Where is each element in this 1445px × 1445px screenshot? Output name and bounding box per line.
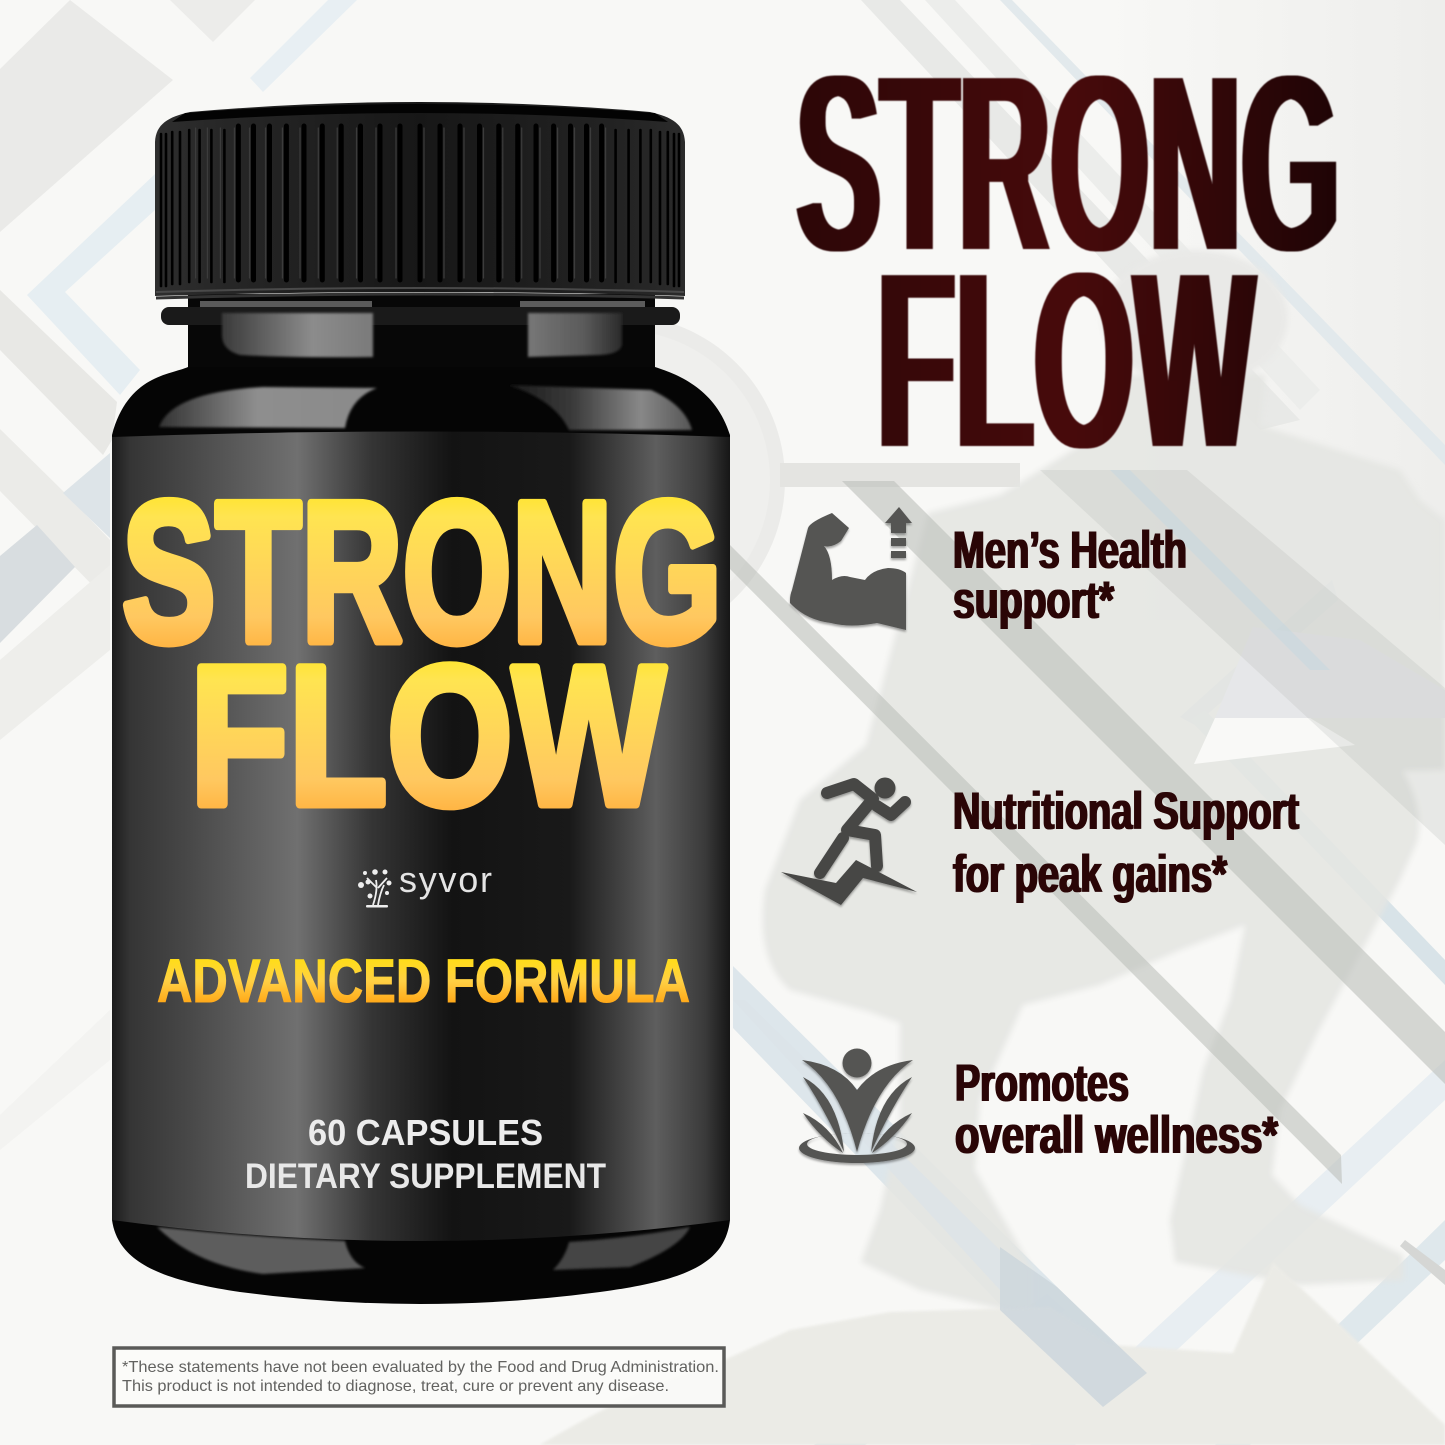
- brand logo: syvor: syvor: [399, 859, 492, 900]
- label title: STRONG FLOW: FLOW: [190, 625, 665, 846]
- icon: runner: [781, 778, 917, 905]
- background: faded athlete silhouette: [455, 250, 1445, 1445]
- text: promotes overall wellness: Promotes: [955, 1054, 1129, 1113]
- text: promotes overall wellness: [955, 1054, 1278, 1165]
- disclaimer text: *These statements have not been evaluated by the Food and Drug Administration.: [122, 1359, 719, 1376]
- shoulder highlights: [159, 385, 692, 430]
- text: men's health support: [953, 521, 1187, 630]
- bottle body: [112, 367, 730, 1304]
- cap ridges: [161, 126, 679, 286]
- text: men's health support: Men’s Health: [953, 521, 1187, 580]
- disclaimer text: This product is not intended to diagnose, treat, cure or prevent any disease.: [122, 1378, 669, 1395]
- icon: tree: [358, 869, 392, 908]
- text: nutritional support for peak gains: for peak gains*: [953, 845, 1227, 904]
- text: nutritional support for peak gains: [953, 782, 1299, 904]
- benefit: nutritional support: [781, 778, 1299, 905]
- benefit: men's health: [790, 507, 1187, 630]
- label: [112, 432, 730, 1241]
- icon: flexed arm with up arrow: [790, 507, 912, 630]
- disclaimer box: [114, 1348, 724, 1406]
- label: capsule count: 60 CAPSULES: [308, 1112, 543, 1153]
- text: men's health support: support*: [953, 571, 1114, 630]
- label title: STRONG FLOW: [122, 461, 722, 846]
- brand logo: syvor: [358, 859, 492, 908]
- bottle neck: [161, 294, 680, 374]
- title: STRONG FLOW: [796, 20, 1340, 504]
- label: advanced formula: ADVANCED FORMULA: [157, 947, 690, 1015]
- label title: STRONG FLOW: STRONG: [122, 461, 722, 684]
- text: promotes overall wellness: overall wellness*: [955, 1106, 1278, 1165]
- base highlights: [157, 1227, 690, 1274]
- icon: wellness figure with leaves: [799, 1048, 915, 1163]
- disclaimer text: [122, 1359, 719, 1395]
- product bottle: [112, 102, 730, 1304]
- text: nutritional support for peak gains: Nutritional Support: [953, 782, 1299, 841]
- cap: [155, 102, 685, 298]
- benefit: overall wellness: [799, 1048, 1278, 1165]
- label: dietary supplement: DIETARY SUPPLEMENT: [245, 1157, 606, 1196]
